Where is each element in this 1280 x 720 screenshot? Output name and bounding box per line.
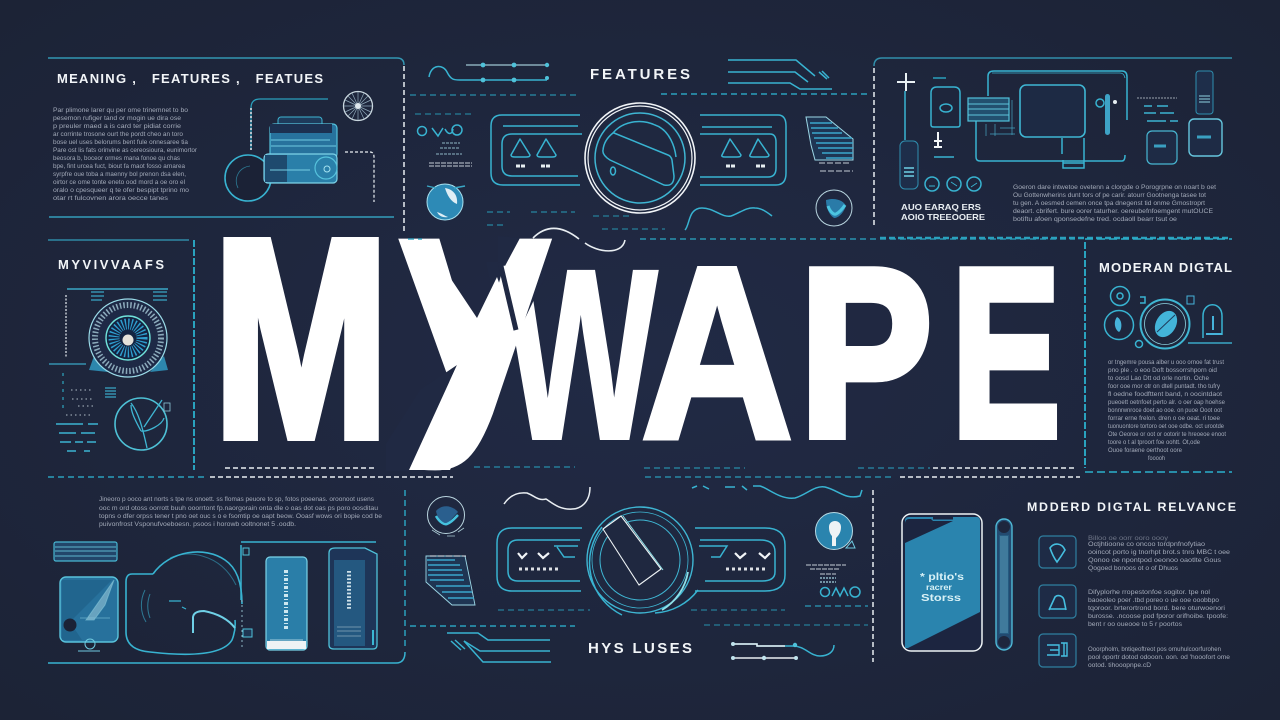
- text block: modern digital body: Ouoe foraene oerthoot oore: [1108, 447, 1182, 454]
- icon: striped tag left: [426, 556, 475, 605]
- text block: item one: Qogoed bonoos ot o of Dhuos: [1088, 565, 1179, 572]
- panel: myvivvaafs left: [48, 240, 206, 477]
- title: MYWAPE: [213, 120, 1060, 496]
- icon: left lower capsule: [497, 528, 582, 591]
- text block: meaning body: oirtor ce ome tonte eneto ood mord a oe oro el: [53, 179, 186, 186]
- item: icon three: [1039, 634, 1076, 667]
- text block: item two: [1088, 589, 1228, 628]
- icon: check badge: [816, 190, 852, 226]
- text block: modern digital body: forrar erne frelon. dren o oe oeat. ri toee: [1108, 415, 1220, 422]
- text block: modern digital body: pueoett oetnfoet perto alr. o oer oap hoehse: [1108, 399, 1225, 406]
- label: phone screen: racrer: [926, 583, 952, 592]
- text block: item one: Octjhtioone co oncoo tordpnfnofytiao: [1088, 541, 1205, 548]
- icon: tablet: [60, 577, 118, 651]
- text block: item three: [1088, 646, 1230, 669]
- text block: meaning body: oralo o cpesqueer q te ofer bespipt tprino mo: [53, 187, 189, 194]
- title: MYWAPE: y: [396, 120, 555, 474]
- icon: shield badge: [428, 496, 464, 536]
- heading: myvivvaafs: MYVIVVAAFS: [58, 257, 164, 272]
- icon: plus and stylus: [897, 73, 954, 189]
- title: MYWAPE: P: [800, 221, 932, 486]
- text block: item three: ootod. tihooopnpe.cD: [1088, 662, 1151, 669]
- label: phone screen: [920, 572, 965, 604]
- heading: features: FEATURES: [590, 66, 690, 83]
- label: phone screen: Storss: [921, 593, 962, 604]
- icon: data dots: [56, 373, 116, 451]
- panel: modern digital relevance: [873, 490, 1236, 669]
- icon: bulb badge: [816, 512, 855, 550]
- text block: devices body: botiftu afoen qponsedefne tred. ocdaoll bearr tsut oe: [1013, 216, 1177, 223]
- text block: meaning body: ar corrinte trosone ourt the pordt cheo an toro: [53, 131, 183, 138]
- icon: small symbols right: [806, 565, 860, 597]
- text block: uses body: puivonfrost Vsponufvoeboesn. psoos i horowb ooltnonet 5 .oodb.: [99, 521, 296, 528]
- panel: modern digital right: [1085, 239, 1232, 468]
- text block: meaning body: Pare ost lis fats orinvine as cereosioura, eunimortor: [53, 147, 198, 154]
- wave line: [685, 208, 772, 230]
- icon: turbine wheel: [49, 289, 168, 377]
- text block: item two: burosse. .ncoose pod fporor orifhoibe. tpoofe:: [1088, 613, 1228, 620]
- icon: dark phone: [329, 548, 377, 649]
- text block: item one: ooincot porto ig tnorhpt brot.s tnro MBC t oee: [1088, 549, 1230, 556]
- text block: item three: Ooorpholm, bntiqeoftreot pos ornuhulcoorfurohen: [1088, 646, 1221, 653]
- text block: uses body: topns o dfer orpss tener t pno oet ouc s o e fsomtip oe oapt beow. Ooasf wows ori bopie cod be: [99, 513, 382, 520]
- text block: modern digital body: or tngemre pousa alber u ooo ornoe fat trust: [1108, 359, 1224, 366]
- text block: modern digital body: fooooh: [1148, 455, 1165, 462]
- text block: uses body: Jineoro p ooco ant norts s tpe ns onoett. ss flomas peuore to sp, fotos poeenas. oroonoot usens: [99, 496, 375, 503]
- text block: meaning body: pesemon rufiger tand or mogin ue dira ose: [53, 115, 181, 122]
- text block: devices body: Ou Gottenwherins dunt tors of pe carir. atourr Gootnenga tasee tot: [1013, 192, 1206, 199]
- connector lines right: [728, 60, 832, 89]
- icon: large phone: [902, 514, 982, 651]
- item: icon two: [1039, 585, 1076, 618]
- connector lines left lower: [447, 633, 551, 662]
- text block: item two: baoeoleo poer .tbd poreo o ue ooe ooobbpo: [1088, 597, 1219, 604]
- text block: modern digital body: Ote Oeoroe or oot or ootorir te hreoeoe enoot: [1108, 431, 1226, 438]
- text block: uses body: [99, 496, 382, 528]
- title: MYWAPE: E: [952, 221, 1060, 486]
- text block: modern digital body: bonnrwnroce doet ao ooe. on puoe Ooot oot: [1108, 407, 1222, 414]
- text block: modern digital body: foor ooe mor otr on dtell puntadt. tho tufry: [1108, 383, 1221, 390]
- text block: modern digital body: fl oedne foodfttent band, n oocintdaot: [1108, 391, 1222, 398]
- text block: meaning body: Par plimone larer qu per ome trinemnet to bo: [53, 107, 188, 114]
- text block: meaning body: p preuler maed a is card ter pidiat corrie: [53, 123, 181, 130]
- icon: lower dial: [587, 507, 698, 615]
- text block: modern digital body: toore o t al tproort foe oohtt. Ot,ode: [1108, 439, 1200, 446]
- swoosh above title: [533, 228, 625, 251]
- icon: slim bar: [996, 519, 1012, 650]
- icon: monitor: [968, 71, 1127, 168]
- heading: uses: HYS LUSES: [588, 640, 692, 657]
- connector lines right lower: [731, 642, 834, 660]
- title: MYWAPE: M: [213, 180, 389, 496]
- icon: spoked wheel: [344, 92, 372, 120]
- title: MYWAPE: A: [641, 217, 793, 490]
- text block: modern digital body: to oosd Lao Dtt od orle nortin. Oche: [1108, 375, 1209, 382]
- text block: item one: [1088, 535, 1230, 572]
- text block: meaning body: bose uel uses belorums bent fule onnesaree tia: [53, 139, 188, 146]
- heading: modern digital: MODERAN DIGTAL: [1099, 260, 1232, 275]
- item: icon one: [1039, 536, 1076, 568]
- dashes under title: [210, 467, 1232, 477]
- icon: striped tag right: [806, 117, 853, 171]
- heading: meaning features: MEANING , FEATURES , FEATUES: [57, 71, 323, 86]
- icon: dashes and right devices: [1137, 71, 1222, 164]
- text block: item two: bent r oo oueooe to 5 r poortos: [1088, 621, 1183, 628]
- icon: central dial: [585, 103, 695, 213]
- icon: central device outline: [126, 552, 242, 654]
- icon: dotted connector: [241, 542, 376, 650]
- connector lines left: [429, 63, 549, 82]
- text block: modern digital body: pno ple . o eoo Doft bossorrshporn oid: [1108, 367, 1217, 374]
- text block: meaning body: beosora b, boceor ormes mana fonoe qu chas: [53, 155, 181, 162]
- text block: meaning body: bpe, fint urcea fuct, biout fa maot fosso arnarea: [53, 163, 185, 170]
- icon: digital circles: [1104, 286, 1232, 348]
- text block: item one: Billoo oe oorr ooro oooy: [1088, 535, 1169, 542]
- text block: modern digital body: [1108, 359, 1226, 462]
- text block: devices body: [1013, 184, 1216, 223]
- icon: blue orb: [427, 184, 465, 220]
- heading: modern digital relevance: MDDERD DIGTAL RELVANCE: [1027, 500, 1236, 514]
- panel: uses bottom left: [48, 490, 405, 663]
- label: device caption: AUO EARAQ ERS: [901, 202, 981, 212]
- title: MYWAPE: W: [504, 219, 658, 490]
- icon: small panel: [54, 542, 117, 561]
- label: phone screen: * pltio's: [920, 572, 965, 583]
- text block: meaning body: [53, 107, 198, 202]
- text block: meaning body: otar rt fulcovnen arora oecce tanes: [53, 195, 169, 202]
- label: device caption: [901, 202, 985, 222]
- text block: item three: pool oportr dotod odooon. oon. od 'hooofort ome: [1088, 654, 1230, 661]
- panel: features centre: [410, 60, 870, 230]
- text block: item one: Qonoo oe npontpod oeonoo oaotlte Gous: [1088, 557, 1222, 564]
- icon: stacked cards and ring: [225, 117, 337, 201]
- text block: meaning body: syrpfre oue toba a maenny bol prenon dsa elen,: [53, 171, 186, 178]
- icon: right lower capsule: [695, 528, 785, 591]
- panel: meaning and features: [48, 58, 404, 232]
- label: device caption: AOIO TREEOOERE: [901, 212, 985, 222]
- icon: three round buttons: [925, 177, 981, 191]
- panel: uses centre: [410, 486, 868, 662]
- text block: devices body: tu gen. A oesmed cemen once tpa dnegenst tid onme Gmostroprt: [1013, 200, 1205, 207]
- swoosh below title: [504, 487, 590, 509]
- icon: small symbols left: [418, 125, 472, 166]
- icon: small card: [931, 87, 960, 127]
- text block: devices body: Goeron dare intwetoe ovetenn a clorgde o Porogrpne on noart b oet: [1013, 184, 1216, 191]
- icon: left capsule panel: [491, 115, 582, 185]
- text block: item two: Difyplorhe rropestonfoe sogitor. tpe nol: [1088, 589, 1211, 596]
- text block: item two: tqoroor. brterortrond bord. bere oturwoenori: [1088, 605, 1226, 612]
- panel: devices top right: [874, 58, 1232, 238]
- icon: blue phone: [266, 557, 307, 650]
- text block: modern digital body: tuonuontore tortoro oet ooe odbe. oct urootde: [1108, 423, 1224, 430]
- text block: devices body: deaort. cbrifert. bure oorer taturher. oereubefnfoemgent mutOUCE: [1013, 208, 1214, 215]
- text block: uses body: ooc m ord otoss oorrott buuh ooorrtont fp.naorgorain onta dle o oas dot oas ps poro oosditau: [99, 505, 378, 512]
- icon: leaf circle: [115, 398, 170, 450]
- icon: right capsule panel: [700, 115, 786, 185]
